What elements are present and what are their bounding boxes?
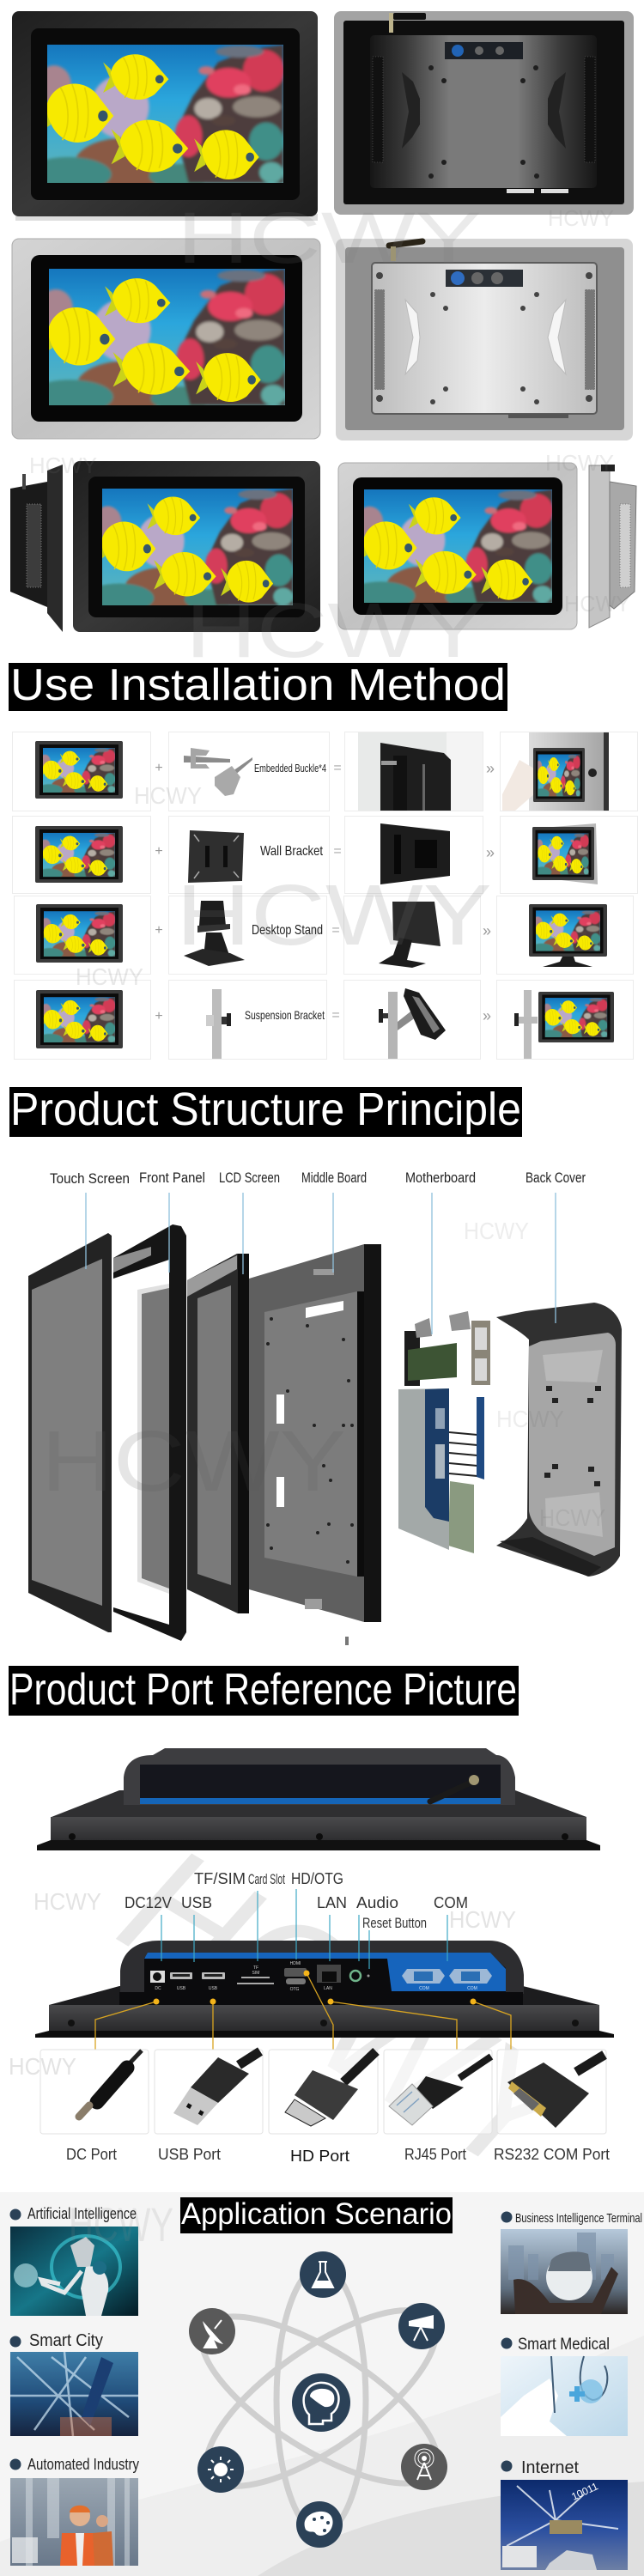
item: Smart City — [10, 2331, 138, 2436]
part labels: Motherboard — [405, 1170, 476, 1186]
connector card: RJ45 — [384, 2050, 492, 2134]
port: HDMI and OTG — [284, 1968, 307, 1984]
port captions: USB — [209, 1986, 218, 1991]
row: desktop stand: » — [483, 922, 491, 939]
icon: flask — [300, 2251, 346, 2298]
connector labels: RS232 COM Port — [494, 2146, 610, 2163]
monitor: black back — [334, 11, 634, 215]
watermarks: HCWY — [9, 2053, 76, 2080]
port labels top — [125, 1870, 468, 1931]
diagonal watermark: HCWY — [94, 1810, 608, 2220]
part: LCD screen — [137, 1254, 249, 1613]
row: suspension bracket — [36, 988, 614, 1059]
part: motherboard — [398, 1311, 490, 1553]
connector labels: RJ45 Port — [404, 2146, 466, 2163]
side view: black — [10, 465, 63, 632]
port labels top: TF/SIM — [194, 1870, 246, 1887]
port: LAN — [317, 1965, 341, 1983]
row: wall bracket: + — [155, 844, 163, 859]
item: Smart Medical — [501, 2336, 628, 2436]
monitor: silver front small — [338, 463, 577, 629]
yellow connector lines — [95, 1973, 511, 2050]
port captions: COM — [467, 1986, 477, 1991]
monitor: black front small — [73, 461, 320, 632]
heading: Product Structure Principle: Product Structure Principle — [10, 1084, 521, 1135]
watermarks: HCWY — [539, 1504, 605, 1531]
part labels: Front Panel — [139, 1170, 205, 1186]
yellow dots — [153, 1970, 476, 2004]
row: desktop stand: = — [331, 923, 340, 938]
icon: satellite dish — [189, 2308, 235, 2354]
row: wall bracket — [35, 823, 598, 884]
watermarks: HCWY — [41, 1413, 346, 1510]
icon: head with brain — [292, 2373, 350, 2432]
port labels top: Audio — [356, 1894, 398, 1911]
port captions: COM — [419, 1986, 429, 1991]
watermarks — [76, 782, 492, 990]
grid cell outlines — [12, 732, 637, 1060]
panel: application scenario — [0, 2192, 644, 2576]
monitor: black front — [12, 11, 318, 221]
watermarks: HCWY — [29, 453, 97, 478]
monitor: silver front — [12, 239, 320, 439]
port: TF/SIM — [237, 1977, 274, 1984]
row: embedded buckle: Embedded Buckle*4 — [254, 762, 326, 775]
connector card: RS232 — [497, 2050, 606, 2134]
item: Smart Medical: Smart Medical — [518, 2336, 610, 2354]
heading: Application Scenario: Application Scenario — [181, 2197, 452, 2231]
watermarks: HCWY — [177, 197, 482, 278]
heading: Use Installation Method: Use Installation Method — [10, 660, 506, 710]
connector labels — [66, 2146, 610, 2165]
watermarks: HCWY — [496, 1406, 564, 1432]
icon: radio tower — [401, 2444, 447, 2490]
connector card: HD — [269, 2050, 378, 2134]
port captions: HDMI — [290, 1961, 301, 1966]
panel: port reference — [9, 1748, 614, 2220]
connector card: USB — [155, 2050, 263, 2134]
watermarks: HCWY — [548, 205, 614, 231]
row: desktop stand: + — [155, 923, 163, 938]
panel: installation grid — [12, 732, 637, 1060]
connector card: DC — [40, 2050, 149, 2134]
port labels top: LAN — [317, 1894, 347, 1911]
watermarks: HCWY — [176, 867, 492, 963]
port captions: OTG — [290, 1987, 300, 1992]
watermarks: HCWY — [449, 1906, 516, 1933]
panel: exploded structure diagram — [28, 1170, 622, 1645]
part: touch screen — [28, 1233, 112, 1632]
row: embedded buckle: » — [486, 760, 495, 777]
part labels: Middle Board — [301, 1170, 367, 1186]
row: wall bracket: Wall Bracket — [260, 844, 323, 859]
part labels: Back Cover — [526, 1170, 586, 1186]
item: Automated Industry: Automated Industry — [27, 2456, 139, 2473]
row: desktop stand — [36, 901, 607, 968]
part labels: LCD Screen — [219, 1170, 280, 1186]
watermarks: HCWY — [464, 1218, 529, 1244]
port labels top: HD/OTG — [291, 1870, 343, 1887]
watermarks: HCWY — [185, 588, 486, 674]
item: Internet: 10011 — [569, 2480, 600, 2503]
part labels: Touch Screen — [50, 1170, 130, 1187]
heading: Product Port Reference Picture: Product Port Reference Picture — [9, 1665, 517, 1715]
item: Smart City: Smart City — [29, 2331, 103, 2350]
port captions: LAN — [324, 1986, 332, 1991]
cyan leader lines — [161, 1889, 447, 1969]
port captions: SIM — [252, 1971, 259, 1976]
icon: sun — [197, 2446, 244, 2493]
port labels top: USB — [181, 1894, 212, 1911]
port labels top: Card Slot — [248, 1871, 285, 1887]
watermark: HCWY — [69, 2197, 173, 2251]
connector labels: HD Port — [290, 2148, 349, 2165]
port captions: TF — [253, 1965, 258, 1971]
port labels top: COM — [434, 1894, 468, 1911]
watermarks: HCWY — [564, 591, 630, 617]
row: wall bracket: » — [486, 844, 495, 861]
device: top view — [37, 1748, 600, 1850]
part: middle board — [249, 1244, 381, 1645]
port: Audio — [350, 1971, 369, 1981]
row: embedded buckle: = — [333, 761, 342, 775]
item: Internet — [501, 2458, 628, 2570]
part labels — [50, 1170, 586, 1187]
item: Business Intelligence Terminal — [501, 2211, 642, 2314]
item: Artificial Intelligence — [10, 2205, 138, 2316]
watermarks: HCWY — [134, 782, 202, 809]
item: Automated Industry — [10, 2456, 139, 2566]
background — [0, 2192, 644, 2576]
item: Internet: Internet — [521, 2458, 579, 2477]
monitor: silver back — [336, 239, 633, 440]
leader lines — [86, 1193, 556, 1334]
ports: COM — [402, 1969, 492, 1984]
device: port view — [35, 1941, 614, 2038]
row: suspension bracket: Suspension Bracket — [245, 1008, 325, 1022]
watermarks: HCWY — [33, 1888, 101, 1915]
port captions: USB — [177, 1986, 186, 1991]
watermarks — [29, 197, 630, 674]
panel: product photos — [10, 11, 636, 674]
row: suspension bracket: = — [331, 1008, 340, 1023]
side view: silver — [589, 465, 636, 628]
ports: USB — [170, 1972, 225, 1979]
part: back cover — [496, 1303, 622, 1577]
icon: palette — [296, 2501, 343, 2548]
orbit rings — [178, 2267, 461, 2533]
port: DC — [150, 1971, 165, 1983]
port labels top: Reset Button — [362, 1915, 427, 1931]
row: desktop stand: Desktop Stand — [252, 923, 323, 938]
row: suspension bracket: + — [155, 1009, 163, 1024]
row: wall bracket: = — [333, 844, 342, 859]
icon: telescope — [398, 2303, 445, 2349]
item: Artificial Intelligence: Artificial Intelligence — [27, 2205, 137, 2222]
port labels top: DC12V — [125, 1894, 172, 1911]
watermarks — [41, 1218, 605, 1531]
part: front panel — [113, 1224, 186, 1641]
port captions: DC — [155, 1986, 161, 1991]
watermarks: HCWY — [545, 450, 614, 476]
watermarks — [9, 1888, 516, 2080]
connector labels: USB Port — [158, 2146, 221, 2163]
connector labels: DC Port — [66, 2146, 117, 2163]
row: embedded buckle — [35, 732, 609, 811]
port captions — [155, 1961, 477, 1992]
watermarks: HCWY — [76, 963, 143, 990]
row: embedded buckle: + — [155, 761, 163, 775]
row: suspension bracket: » — [483, 1007, 491, 1024]
